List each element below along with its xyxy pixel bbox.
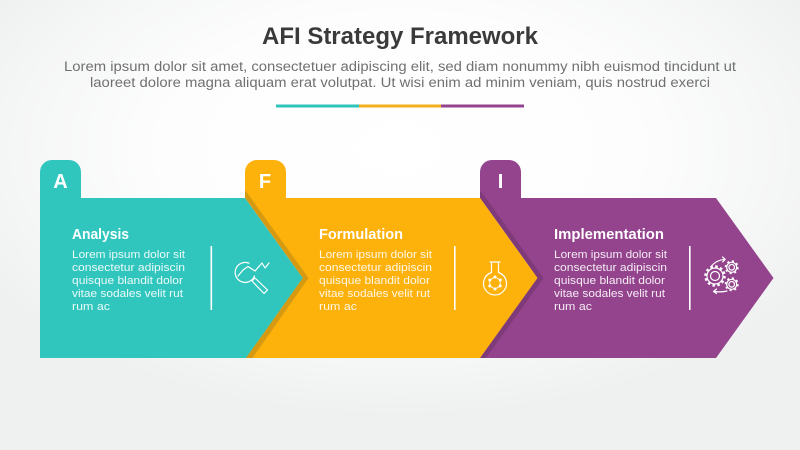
tricolor divider — [276, 104, 524, 108]
letter tab: F: F — [259, 171, 271, 193]
text block: implementation: vitae sodales velit rut — [554, 288, 666, 300]
subtitle text — [64, 59, 736, 90]
subtitle text: laoreet dolore magna aliquam erat volutpat. Ut wisi enim ad minim veniam, quis nostrud exerci — [90, 75, 710, 90]
text block: analysis: quisque blandit dolor — [72, 275, 183, 287]
panel: analysis — [40, 160, 303, 358]
text block: analysis: Analysis — [72, 226, 129, 243]
letter tab: I: I — [498, 171, 503, 193]
icon: gears with arrows — [706, 257, 738, 294]
vertical dividers — [210, 246, 691, 310]
icon: magnifier over chart line — [235, 262, 269, 294]
title: AFI Strategy Framework — [262, 23, 539, 50]
text block: implementation: Lorem ipsum dolor sit — [554, 249, 668, 261]
text block: analysis: Lorem ipsum dolor sit — [72, 249, 186, 261]
text block: analysis — [72, 226, 186, 313]
text block: implementation: consectetur adipiscin — [554, 262, 667, 274]
text block: formulation: quisque blandit dolor — [319, 275, 430, 287]
text block: formulation: vitae sodales velit rut — [319, 288, 431, 300]
panel: implementation — [480, 160, 774, 358]
text block: formulation: consectetur adipiscin — [319, 262, 432, 274]
panel: formulation — [245, 160, 538, 358]
text block: analysis: rum ac — [72, 301, 110, 313]
subtitle text: Lorem ipsum dolor sit amet, consectetuer adipiscing elit, sed diam nonummy nibh euismod tincidunt ut — [64, 59, 736, 74]
arrow body: formulation — [245, 160, 538, 358]
icon: flask — [484, 262, 506, 295]
text block: analysis: vitae sodales velit rut — [72, 288, 184, 300]
text block: implementation: rum ac — [554, 301, 592, 313]
arrow body: analysis — [40, 160, 303, 358]
arrow body: implementation — [480, 160, 774, 358]
text block: analysis: consectetur adipiscin — [72, 262, 185, 274]
text block: formulation: Formulation — [319, 226, 403, 243]
text block: formulation: Lorem ipsum dolor sit — [319, 249, 433, 261]
text block: formulation — [319, 226, 433, 313]
text block: implementation — [554, 226, 668, 313]
text block: implementation: quisque blandit dolor — [554, 275, 665, 287]
text block: implementation: Implementation — [554, 226, 664, 243]
shadow: formulation over analysis — [245, 190, 308, 358]
shadow: implementation over formulation — [480, 190, 544, 358]
letter tab: A: A — [53, 171, 68, 193]
text block: formulation: rum ac — [319, 301, 357, 313]
